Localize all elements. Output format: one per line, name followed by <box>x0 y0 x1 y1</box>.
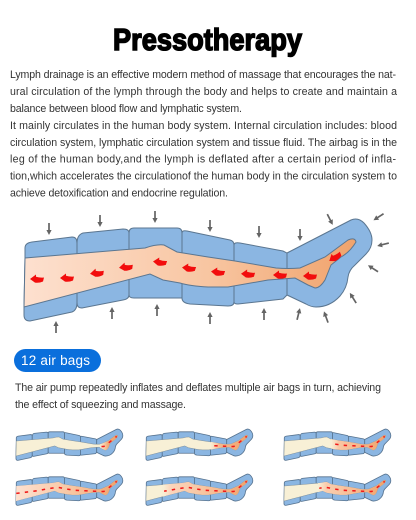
text block: circulation explanation <box>10 120 397 200</box>
mini leg: stage 4 <box>15 474 123 505</box>
mini leg: stage 6 <box>284 474 391 505</box>
air bags <box>24 219 372 321</box>
title: Pressotherapy <box>113 22 303 57</box>
mini leg: stage 2 <box>146 429 253 460</box>
text block: circulation explanation: leg of the human body,and the lymph is deflated after a certain period of infla- <box>10 154 396 166</box>
text block: lymph drainage intro: balance between blood flow and lymphatic system. <box>10 103 242 115</box>
mini leg: stage 5 <box>146 474 253 505</box>
text block: air pump description <box>15 382 381 411</box>
text block: circulation explanation: tion,which accelerates the circulationof the human body in the circulation system to <box>10 170 397 182</box>
text block: lymph drainage intro: ural circulation of the lymph through the body and helps to create and maintain a <box>10 86 397 98</box>
mini leg: stage 1 <box>16 429 123 460</box>
text block: circulation explanation: circulation system, lymphatic circulation system and tissue fluid. The airbag is in the <box>10 137 397 149</box>
mini leg: stage 3 <box>284 429 391 460</box>
badge: 12 air bags: 12 air bags <box>21 353 90 368</box>
text block: air pump description: the effect of squeezing and massage. <box>15 399 186 411</box>
text block: lymph drainage intro <box>10 69 397 115</box>
text block: circulation explanation: It mainly circulates in the human body system. Internal circulation includes: blood <box>10 120 397 132</box>
text block: circulation explanation: achieve detoxification and endocrine regulation. <box>10 188 228 200</box>
main leg diagram <box>24 211 389 333</box>
leg with lymph flow <box>24 239 356 307</box>
text block: air pump description: The air pump repeatedly inflates and deflates multiple air bags in turn, achieving <box>15 382 381 394</box>
pressure arrows <box>46 211 389 333</box>
badge: 12 air bags <box>14 349 101 372</box>
red flow arrows <box>30 249 343 283</box>
text block: lymph drainage intro: Lymph drainage is an effective modern method of massage that encourages the nat- <box>10 69 396 81</box>
